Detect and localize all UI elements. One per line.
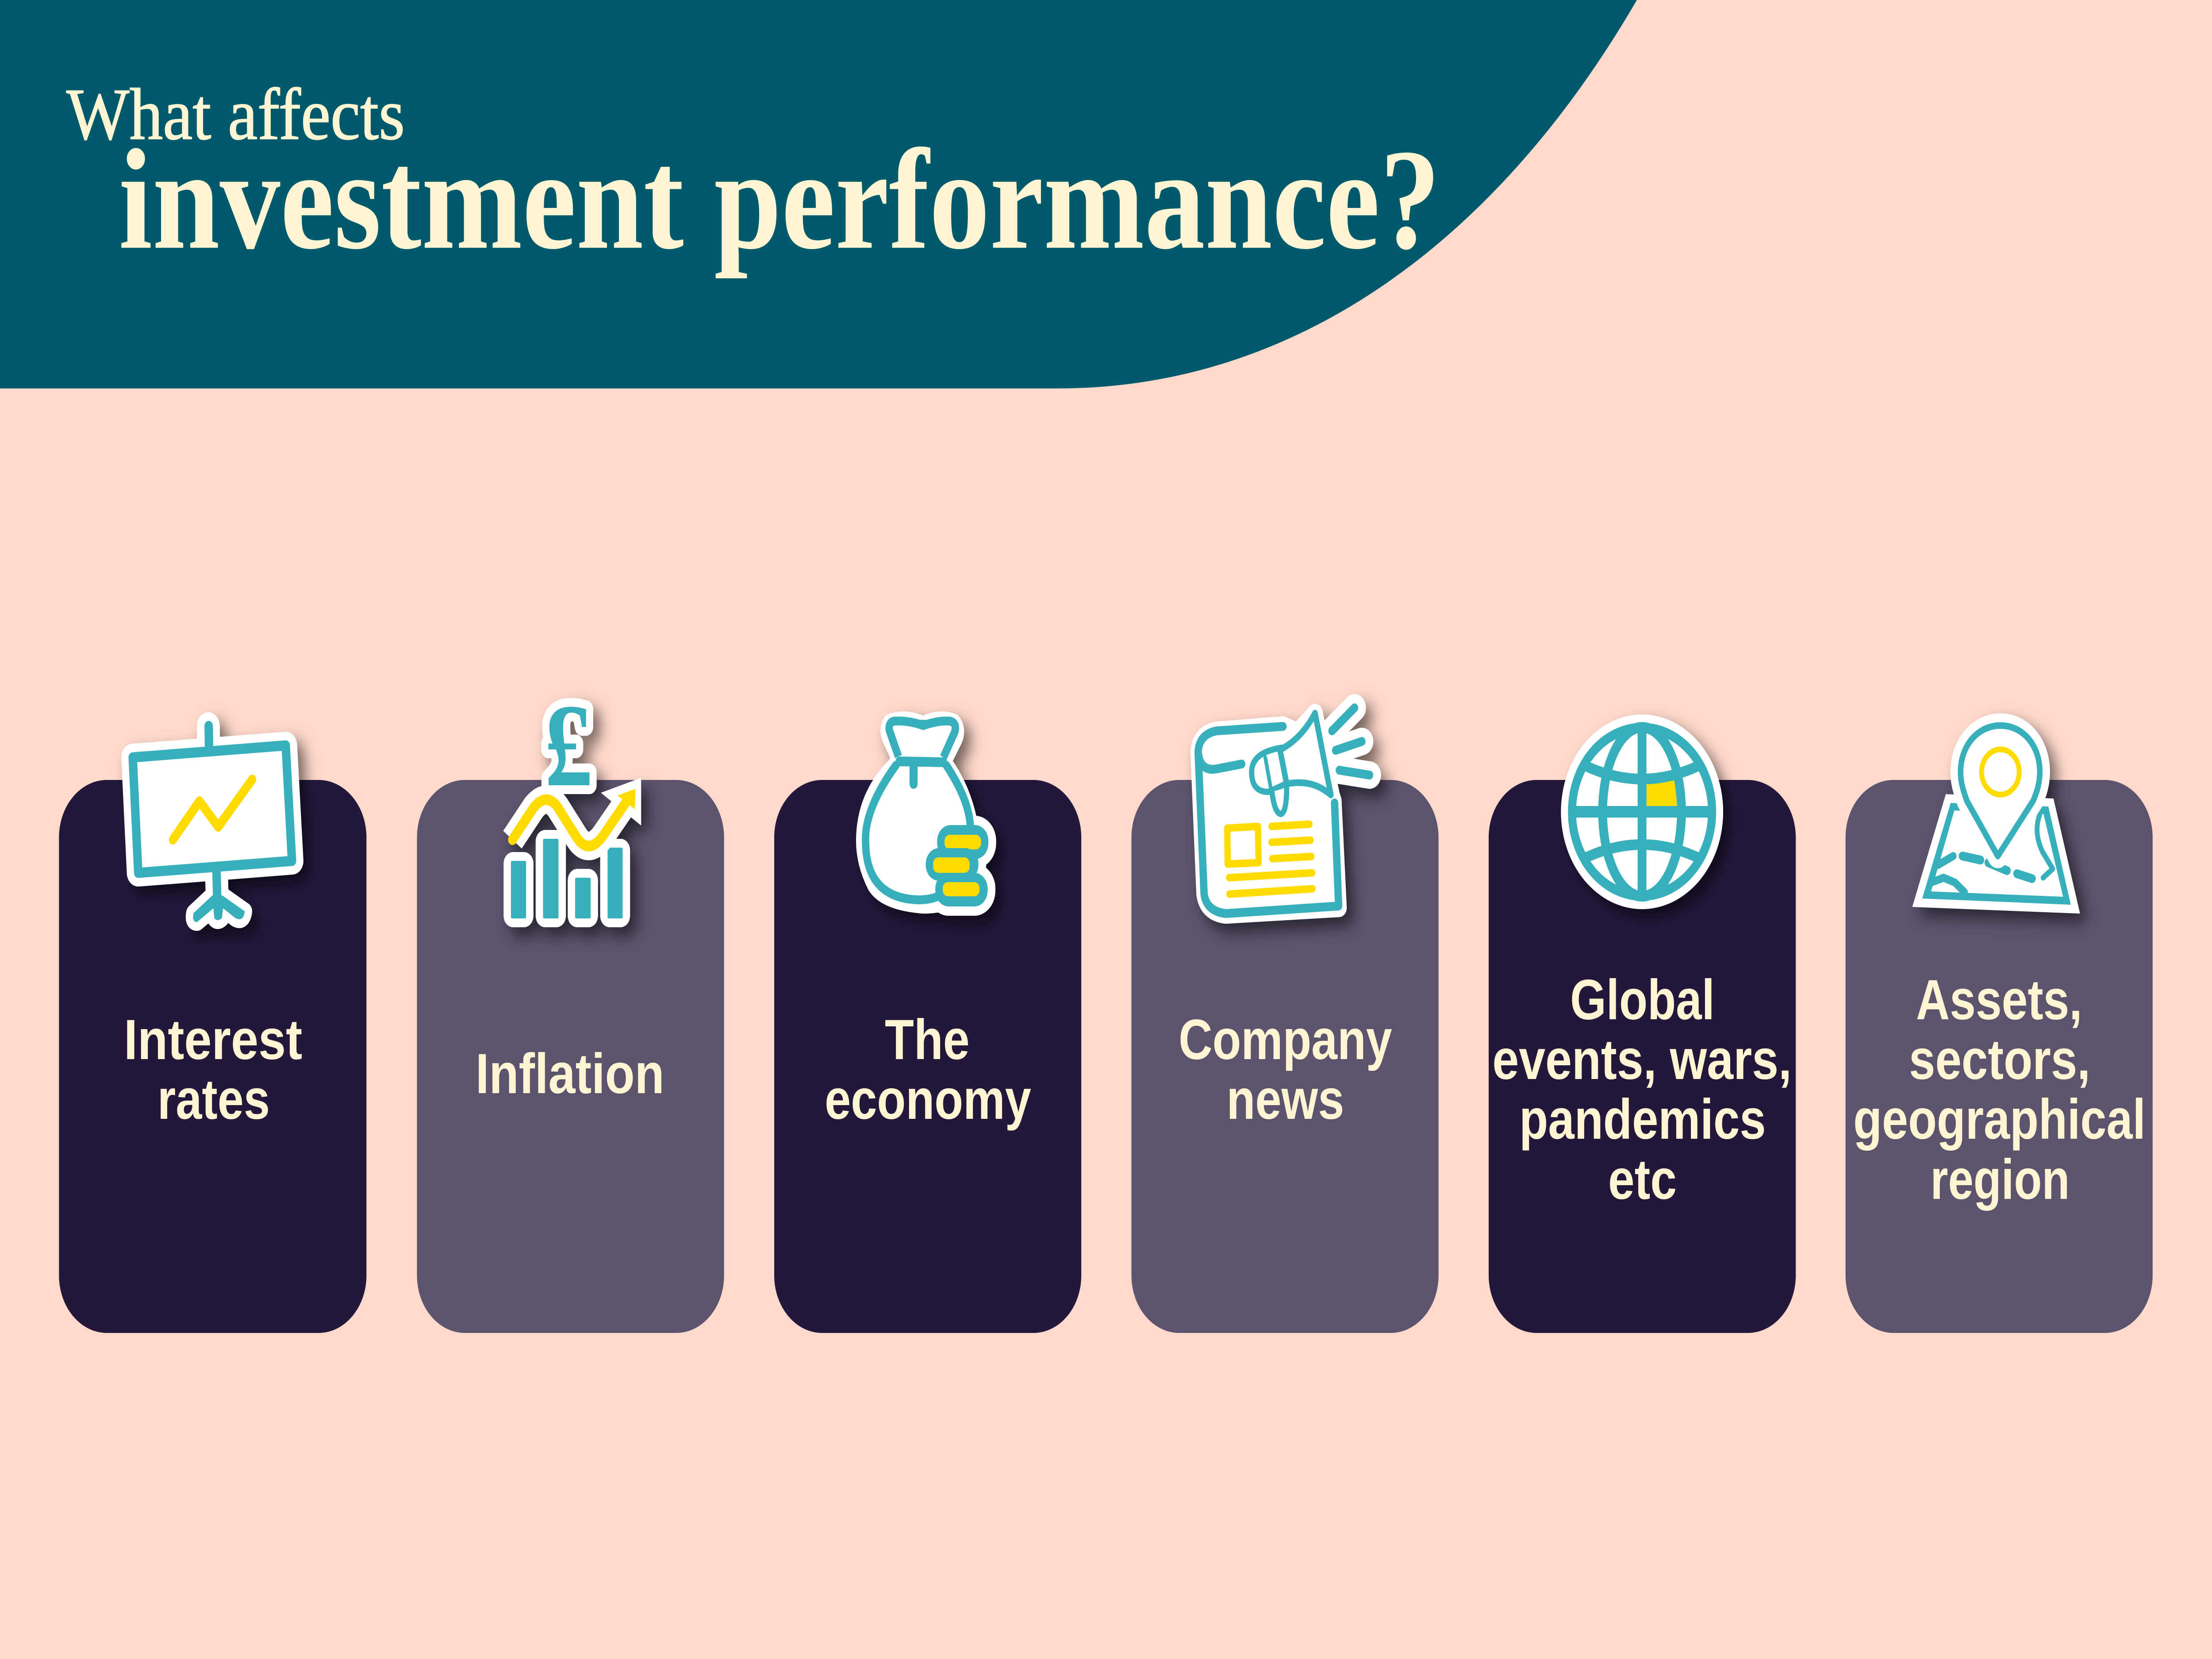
card: inflation (417, 780, 724, 1333)
coins (926, 825, 988, 906)
title (66, 74, 1440, 279)
bag body (865, 765, 970, 900)
card: the economy (774, 780, 1081, 1333)
bag neck (889, 721, 956, 757)
sticker outline (864, 721, 988, 906)
pound sign: £ (545, 680, 592, 811)
icon: presentation board (133, 726, 292, 922)
trend arrow (512, 778, 641, 846)
location pin (1961, 726, 2040, 856)
title line one: What affects (66, 74, 405, 155)
card label (1853, 968, 2146, 1211)
card label: etc (1608, 1148, 1677, 1211)
megaphone (1252, 713, 1331, 814)
sticker outline (133, 726, 292, 922)
card: global events (1489, 780, 1796, 1333)
card label: The (885, 1008, 970, 1071)
icon: money bag (864, 719, 988, 906)
card background (1846, 780, 2153, 1333)
sound rays (1332, 708, 1370, 775)
icon: map and location pin (1912, 726, 2080, 914)
card label: events, wars, (1492, 1028, 1792, 1091)
card label: rates (157, 1068, 270, 1131)
header banner (0, 0, 1637, 388)
card label: Assets, (1916, 968, 2082, 1031)
icon: pound sign and chart (503, 680, 641, 927)
card label: pandemics (1519, 1087, 1766, 1151)
card background (417, 780, 724, 1333)
card label: news (1227, 1068, 1344, 1131)
card background (1489, 780, 1796, 1333)
card: company news (1132, 780, 1439, 1333)
card label: Interest (124, 1008, 302, 1071)
card label: sectors, (1909, 1028, 2090, 1091)
board frame (209, 726, 217, 895)
map route and land (1931, 814, 2053, 892)
card background (59, 780, 366, 1333)
icon: globe (1561, 714, 1723, 909)
card label: Inflation (476, 1042, 664, 1105)
sticker outline (1198, 708, 1370, 914)
article image and lines (1227, 824, 1313, 894)
card label: Company (1179, 1008, 1392, 1071)
card: assets sectors region (1846, 780, 2153, 1333)
card label: Global (1570, 968, 1715, 1031)
card label (825, 1008, 1031, 1131)
card background (1132, 780, 1439, 1333)
card label: region (1930, 1148, 2070, 1211)
card label (124, 1008, 302, 1131)
card label: economy (825, 1068, 1031, 1131)
chart zigzag (173, 780, 252, 840)
title line two: investment performance? (119, 119, 1440, 279)
icon: newspaper and megaphone (1198, 708, 1370, 914)
globe grid (1570, 726, 1714, 898)
sticker disc (1561, 714, 1723, 909)
card label (1179, 1008, 1392, 1131)
card label: geographical (1853, 1087, 2146, 1151)
yellow region (1647, 779, 1677, 806)
card: interest rates (59, 780, 366, 1333)
newspaper page (1198, 726, 1339, 914)
card label (1492, 968, 1792, 1211)
bars (503, 830, 630, 927)
card background (774, 780, 1081, 1333)
map (1912, 794, 2080, 914)
